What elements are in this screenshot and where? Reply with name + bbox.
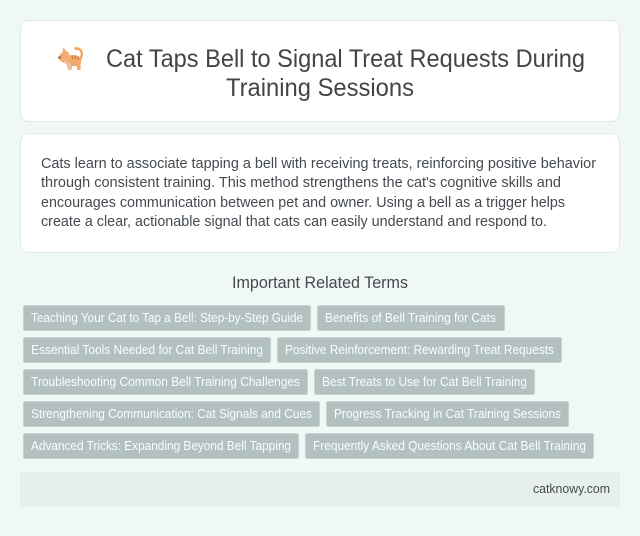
chip: communication: Strengthening Communication: Cat Signals and Cues bbox=[31, 406, 312, 421]
text block: description: through consistent training. This method strengthens the cat's cognitive skills and bbox=[41, 174, 561, 191]
text block: description bbox=[41, 155, 596, 230]
panel: related term chips bbox=[24, 306, 594, 458]
heading: related terms: Important Related Terms bbox=[232, 274, 408, 292]
chip: tools: Essential Tools Needed for Cat Bell Training bbox=[31, 342, 263, 357]
text block: description: encourages communication between pet and owner. Using a bell as a trigger helps bbox=[41, 194, 565, 211]
chip: tools bbox=[24, 338, 270, 362]
chip: benefits bbox=[318, 306, 504, 330]
chip: troubleshooting: Troubleshooting Common Bell Training Challenges bbox=[31, 374, 300, 389]
chip: advanced: Advanced Tricks: Expanding Beyond Bell Tapping bbox=[31, 438, 291, 453]
chip: advanced bbox=[24, 434, 298, 458]
chip: teaching bbox=[24, 306, 310, 330]
text block: description: Cats learn to associate tapping a bell with receiving treats, reinforcing positive behavior bbox=[41, 155, 596, 172]
chip: reinforcement: Positive Reinforcement: Rewarding Treat Requests bbox=[285, 342, 554, 357]
chip: best treats bbox=[314, 370, 534, 394]
chip: troubleshooting bbox=[24, 370, 308, 394]
chip: faq: Frequently Asked Questions About Cat Bell Training bbox=[313, 438, 586, 453]
chip: reinforcement bbox=[278, 338, 562, 362]
footer bbox=[20, 472, 620, 506]
footer: catknowy.com bbox=[533, 481, 610, 496]
chip: communication bbox=[24, 402, 320, 426]
panel: title card bbox=[20, 20, 620, 122]
icon: cat bbox=[58, 47, 83, 70]
chip: benefits: Benefits of Bell Training for Cats bbox=[325, 310, 496, 325]
text block: description: create a clear, actionable signal that cats can easily understand and respond to. bbox=[41, 213, 547, 230]
panel: description card bbox=[20, 134, 620, 252]
chip: faq bbox=[306, 434, 594, 458]
chip: progress bbox=[326, 402, 568, 426]
title: Training Sessions bbox=[226, 74, 414, 102]
chip: best treats: Best Treats to Use for Cat Bell Training bbox=[322, 374, 527, 389]
title bbox=[106, 45, 585, 102]
chip: teaching: Teaching Your Cat to Tap a Bell: Step-by-Step Guide bbox=[31, 310, 303, 325]
title: Cat Taps Bell to Signal Treat Requests During bbox=[106, 45, 585, 73]
chip: progress: Progress Tracking in Cat Training Sessions bbox=[334, 406, 561, 421]
